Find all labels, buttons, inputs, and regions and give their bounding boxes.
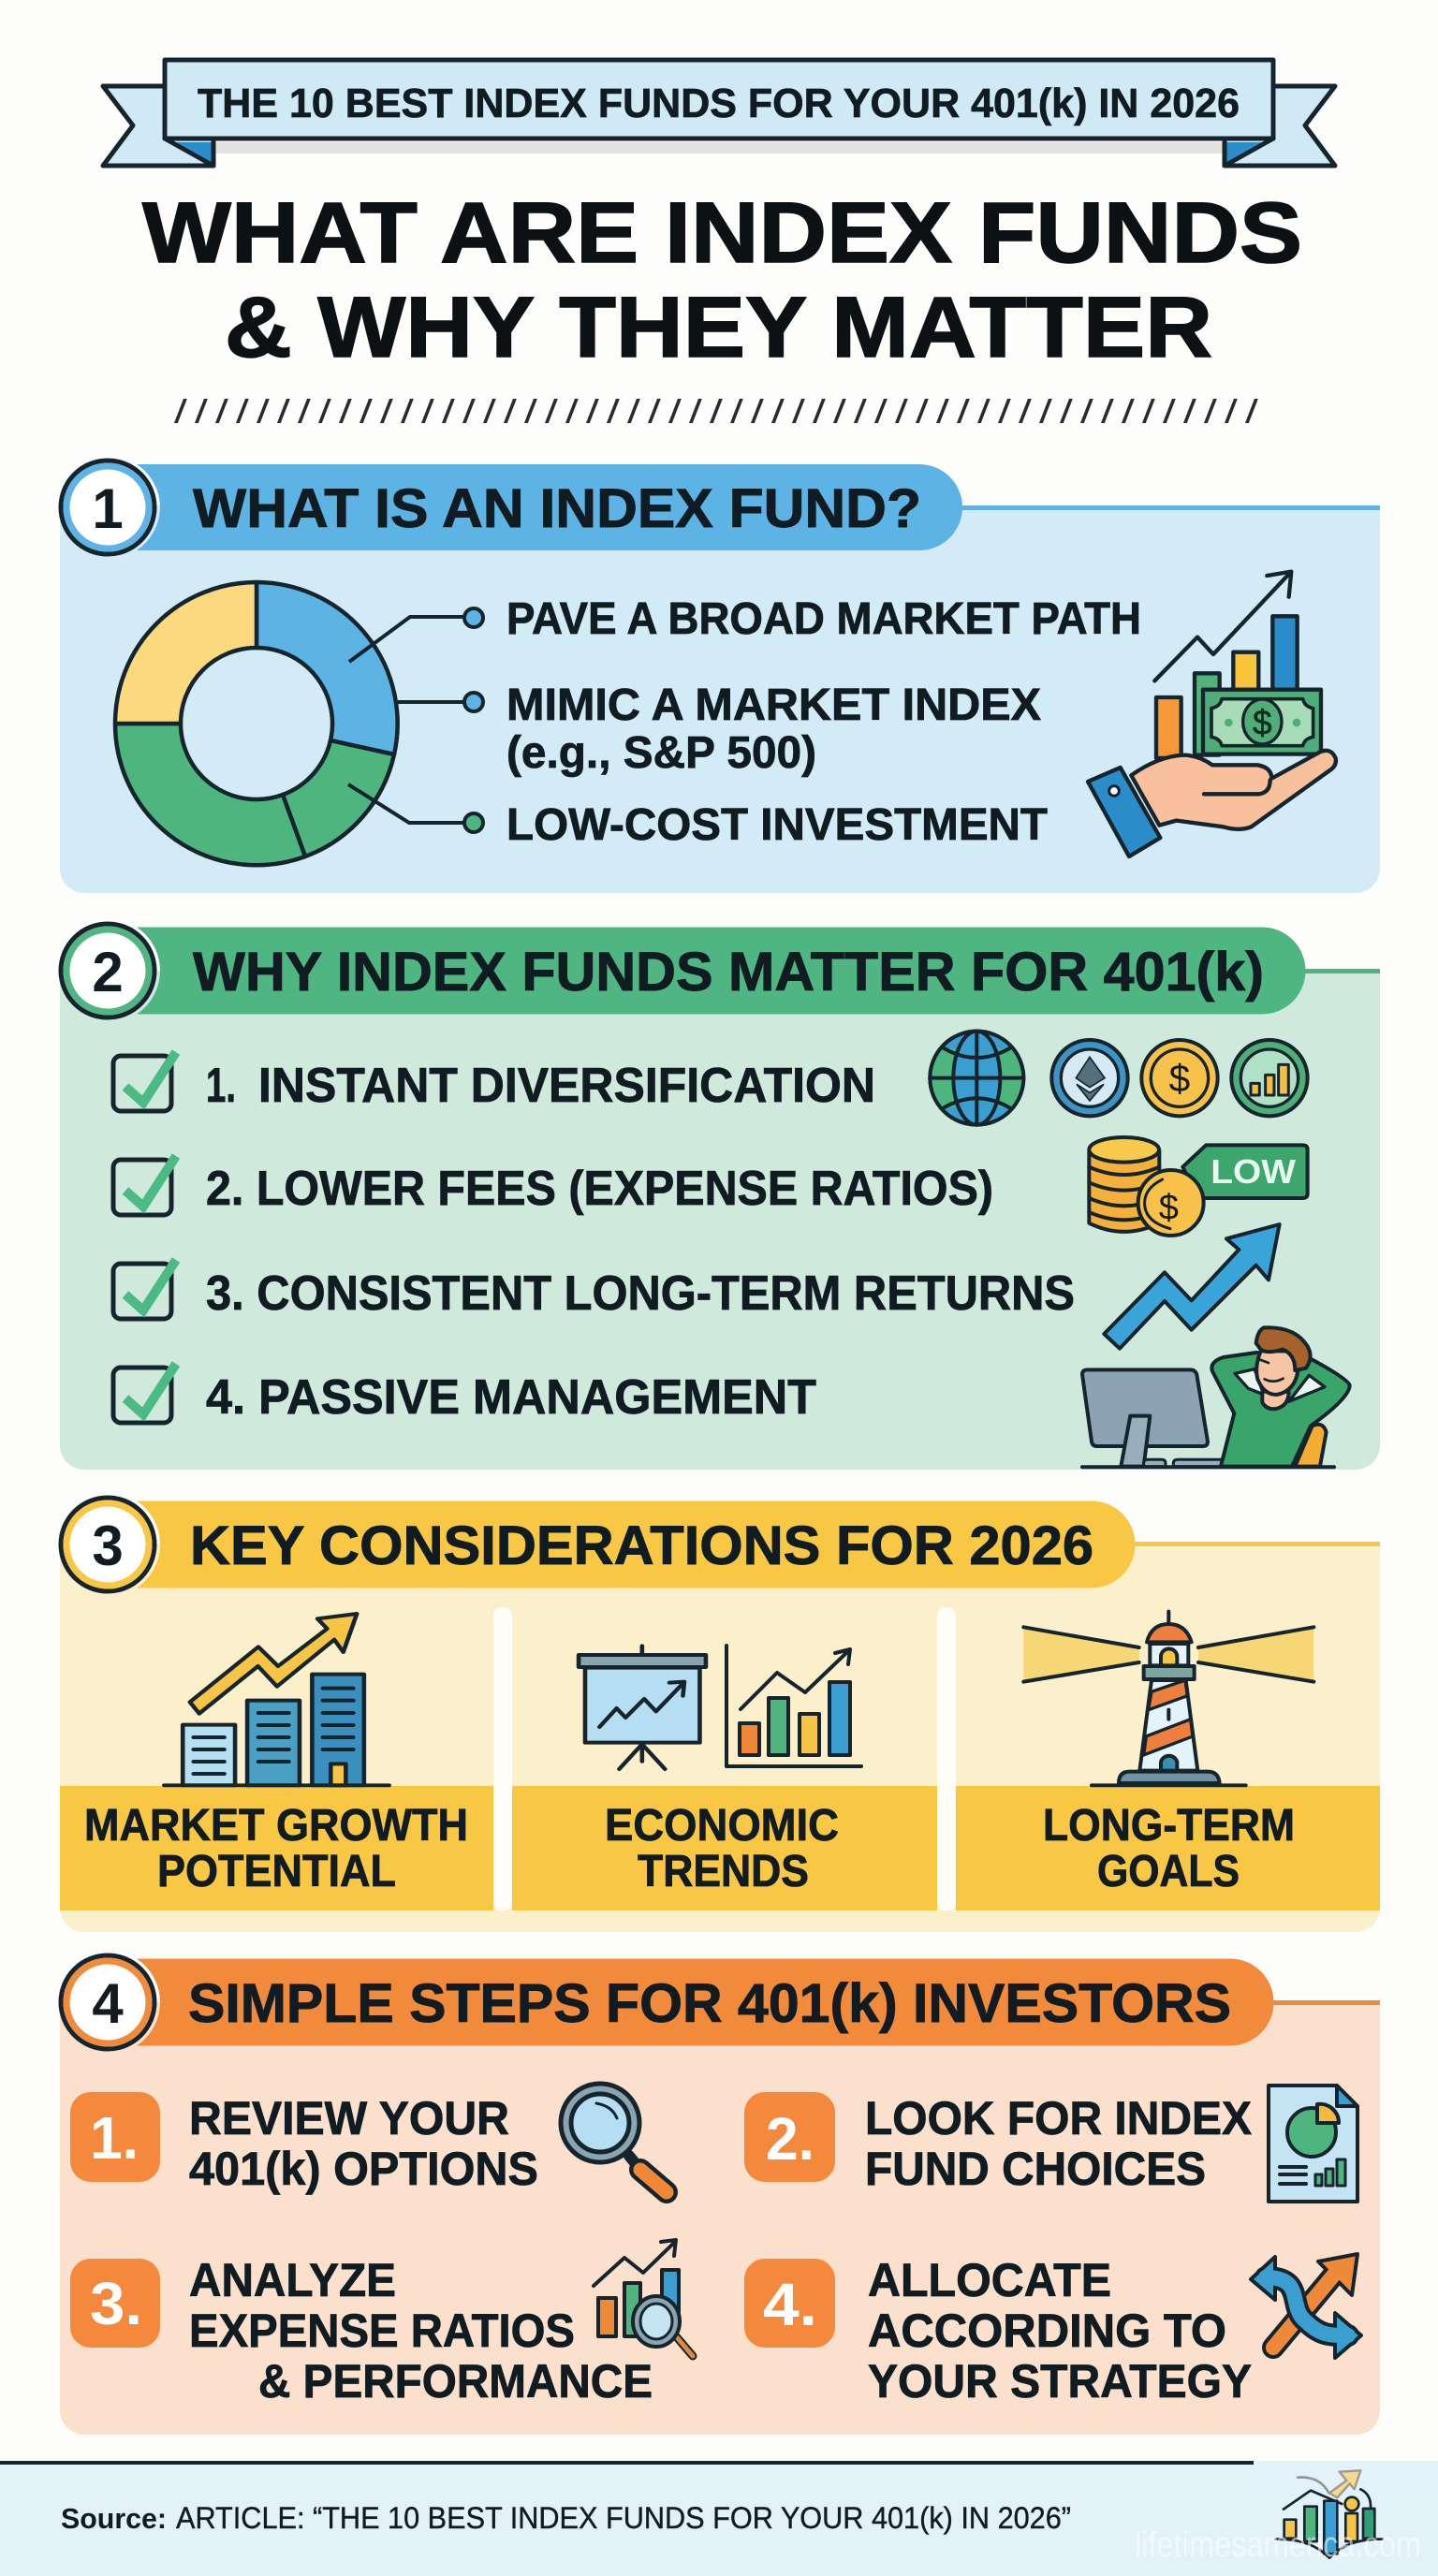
step 4: ACCORDING TO [868,2305,1226,2357]
panel 4 header pill: SIMPLE STEPS FOR 401(k) INVESTORS [188,1973,1231,2034]
panel 2 number badge: 2 [92,941,124,1003]
donut chart [115,582,398,865]
panel 1 number badge [61,461,154,554]
icon: coin stack with LOW tag [1089,1137,1308,1236]
panel 1 header pill [137,464,962,550]
step 3: ANALYZE [189,2254,396,2306]
step 2 [744,2092,1252,2195]
checklist row 1: INSTANT DIVERSIFICATION [258,1059,875,1113]
main title: WHAT ARE INDEX FUNDS [142,185,1302,281]
icon: lighthouse [1023,1612,1313,1785]
icon: bar chart with trend line [726,1646,861,1766]
hatched divider [179,399,1255,423]
card: market growth potential [60,1786,493,1910]
source text: Source: [61,2502,167,2535]
panel 2 background [60,971,1380,1470]
panel 1 background [60,505,1380,893]
checklist row 2: 2. LOWER FEES (EXPENSE RATIOS) [206,1162,993,1216]
panel 2: why index funds matter [60,924,1380,1470]
card: market growth potential: MARKET GROWTH [84,1801,468,1851]
panel 1 number badge: 1 [92,477,124,540]
card: market growth potential: POTENTIAL [157,1847,396,1896]
card: long-term goals: LONG-TERM [1043,1801,1295,1851]
card: long-term goals: GOALS [1097,1847,1240,1896]
checklist row 3: 3. CONSISTENT LONG-TERM RETURNS [206,1266,1075,1321]
step 3: & PERFORMANCE [258,2355,653,2408]
panel 4 background [60,2002,1380,2435]
source text: ARTICLE: “THE 10 BEST INDEX FUNDS FOR YOUR 401(k) IN 2026” [176,2501,1071,2535]
bullet text: MIMIC A MARKET INDEX [506,681,1041,730]
panel 3 background [60,1544,1380,1932]
icon: hand holding money and chart: $ [1253,703,1272,741]
panel 1: what is an index fund [60,461,1380,893]
panel 4: simple steps [60,1955,1380,2435]
icon: magnifying glass [561,2084,667,2192]
panel 3 header pill: KEY CONSIDERATIONS FOR 2026 [190,1515,1093,1576]
step 1: REVIEW YOUR [189,2092,509,2144]
icon: rising blue arrow and relaxed person at computer [1082,1224,1350,1467]
panel 2 number badge [61,924,154,1017]
step 1: 1. [90,2104,139,2172]
icon: chart under magnifier [594,2240,693,2356]
panel 3: key considerations [60,1498,1380,1932]
main title [142,185,1302,375]
ribbon text: THE 10 BEST INDEX FUNDS FOR YOUR 401(k) IN 2026 [198,80,1240,126]
panel 3 header pill [137,1501,1135,1588]
panel 3 number badge [61,1498,154,1591]
panel 4 number badge [61,1955,154,2049]
icon: globe and coins: $ [1159,1189,1179,1228]
card: economic trends [512,1786,937,1910]
icon: globe and coins: $ [1169,1057,1190,1100]
bullet text: (e.g., S&P 500) [506,728,816,778]
icon: hand holding money and chart [1088,572,1336,856]
bullet text: PAVE A BROAD MARKET PATH [506,594,1141,644]
bullet text: LOW-COST INVESTMENT [506,800,1048,850]
icon: report document [1269,2086,1357,2202]
icon: footer logo [1276,2470,1383,2558]
step 2: 2. [766,2105,814,2173]
icon: crossing arrows [1251,2254,1361,2358]
icon: globe and coins [929,1032,1308,1236]
step 2: LOOK FOR INDEX [865,2092,1252,2144]
panel 3 number badge: 3 [92,1515,124,1577]
card: long-term goals [956,1786,1380,1910]
panel 1 header pill: WHAT IS AN INDEX FUND? [193,478,921,539]
step 3: EXPENSE RATIOS [189,2305,575,2357]
panel 4 number badge: 4 [92,1972,124,2035]
panel 2 header pill [137,927,1305,1015]
step 4: ALLOCATE [868,2254,1111,2306]
icon: globe and coins: LOW [1211,1152,1296,1191]
step 3: 3. [90,2270,142,2337]
card: economic trends: ECONOMIC [605,1801,839,1851]
card: economic trends: TRENDS [638,1847,809,1896]
panel 4 header pill [137,1958,1273,2046]
leader lines and dots [348,608,483,832]
bullet text [506,594,1141,850]
footer [0,2461,1438,2576]
step 1: 401(k) OPTIONS [189,2143,538,2195]
panel 2 header pill: WHY INDEX FUNDS MATTER FOR 401(k) [193,942,1264,1003]
step 4 [744,2254,1252,2408]
checklist row 1: 1. [206,1059,236,1113]
step 4: YOUR STRATEGY [868,2355,1252,2408]
step 2: FUND CHOICES [865,2143,1206,2195]
step 1 [70,2092,538,2195]
step 3 [70,2254,653,2408]
icon: buildings with arrow [164,1614,389,1785]
step 4: 4. [763,2271,817,2338]
icon: presentation board [579,1646,706,1769]
header ribbon [103,60,1335,166]
main title: & WHY THEY MATTER [225,280,1212,375]
checklist row 4: 4. PASSIVE MANAGEMENT [206,1370,816,1425]
